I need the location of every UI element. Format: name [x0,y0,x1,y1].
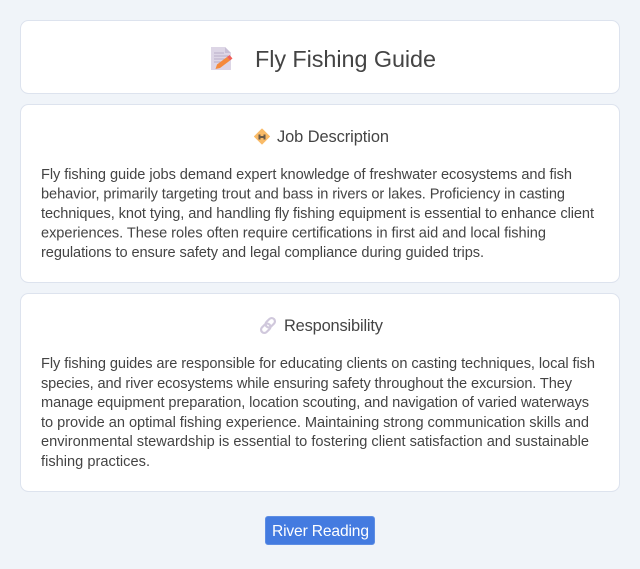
text block: job description: techniques, knot tying, and handling fly fishing equipment is essential to enhance client [41,206,594,222]
text block: job description: behavior, primarily targeting trout and bass in rivers or lakes. Proficiency in casting [41,186,565,202]
button: River Reading [266,516,374,544]
text block: job description: regulations to ensure safety and legal compliance during guided trips. [41,245,484,261]
text block: responsibility: environmental stewardship is essential to fostering client satisfaction and sustainable [41,434,589,450]
icon: document with pencil [211,47,232,70]
button: River Reading: River Reading [272,523,369,540]
text block: job description: Fly fishing guide jobs demand expert knowledge of freshwater ecosystems and fish [41,167,572,183]
panel: job description [20,104,620,282]
title: Fly Fishing Guide [255,46,436,72]
text block: job description [41,167,594,261]
panel: title header [20,20,620,94]
text block: responsibility: species, and river ecosystems while ensuring safety throughout the excursion. They [41,376,573,392]
icon: orange diamond sign [254,129,270,144]
text block: responsibility: to provide an optimal fishing experience. Maintaining strong communication skills and [41,415,589,431]
heading: job description: Job Description [277,128,389,146]
text block: responsibility [41,356,595,470]
heading: responsibility: Responsibility [284,317,384,335]
text block: job description: experiences. These roles often require certifications in first aid and local fishing [41,226,546,242]
text block: responsibility: manage equipment preparation, location scouting, and navigation of varied waterways [41,395,589,411]
text block: responsibility: Fly fishing guides are responsible for educating clients on casting techniques, local fish [41,356,595,372]
icon: chain link [260,317,276,334]
panel: responsibility [20,294,620,492]
text block: responsibility: fishing practices. [41,454,150,470]
